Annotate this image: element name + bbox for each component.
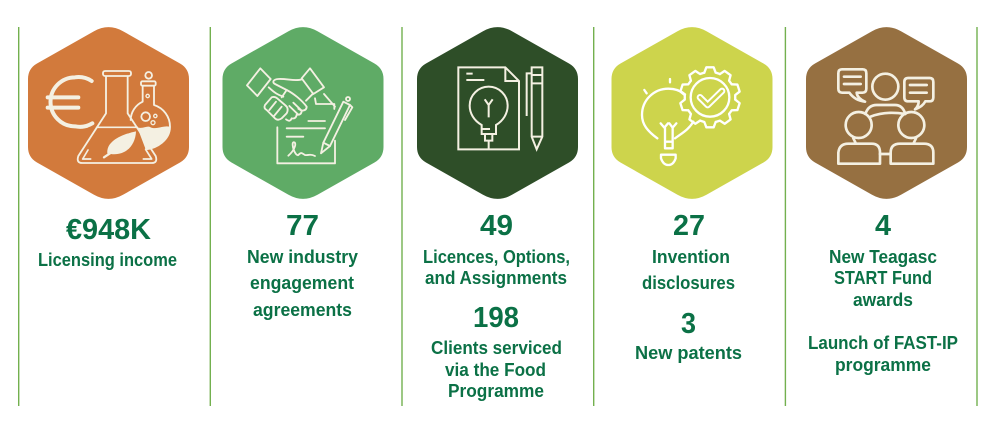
- label: invention disclosures: disclosures: [642, 273, 735, 293]
- hexagon: brown: [806, 27, 967, 199]
- label: new teagasc start fund awards: [829, 247, 937, 310]
- label: new teagasc start fund awards: New Teagasc: [829, 247, 937, 267]
- stat: 77: 77: [286, 210, 319, 242]
- hexagon: orange: [28, 27, 189, 199]
- label: new teagasc start fund awards: START Fund: [834, 268, 932, 288]
- label: new industry engagement agreements: [247, 247, 358, 320]
- panel: licences and clients: [417, 27, 578, 401]
- label: licensing income: Licensing income: [38, 250, 177, 270]
- icon: people in conversation: [838, 69, 933, 164]
- label: clients serviced via the food programme: Programme: [448, 381, 544, 401]
- panel: licensing income: [28, 27, 189, 270]
- label: invention disclosures: [642, 247, 735, 293]
- stat: 948K: €948K: [66, 214, 151, 246]
- label: invention disclosures: Invention: [652, 247, 730, 267]
- label: launch of fast-ip programme: programme: [835, 355, 931, 375]
- label: licences, options and assignments: Licences, Options,: [423, 247, 570, 267]
- stat: 3: 3: [681, 308, 696, 340]
- label: new teagasc start fund awards: awards: [853, 290, 913, 310]
- label: new industry engagement agreements: agreements: [253, 300, 352, 320]
- icon: euro and flasks: [48, 71, 170, 163]
- label: licences, options and assignments: [423, 247, 570, 288]
- icon: light bulb and gear with check mark: [642, 67, 742, 165]
- hexagon: green: [222, 27, 384, 199]
- label: new industry engagement agreements: New industry: [247, 247, 358, 267]
- label: clients serviced via the food programme: Clients serviced: [431, 338, 562, 358]
- label: licences, options and assignments: and Assignments: [425, 268, 567, 288]
- icon: document with light bulb and pen: [458, 67, 542, 149]
- hexagon: dark green: [417, 27, 578, 199]
- stat: 4: 4: [875, 210, 891, 242]
- icon: handshake and signed document: [247, 68, 352, 163]
- label: clients serviced via the food programme: [431, 338, 562, 401]
- label: launch of fast-ip programme: [808, 333, 958, 375]
- panel: invention disclosures and patents: [612, 27, 772, 363]
- label: clients serviced via the food programme: via the Food: [445, 360, 546, 380]
- stat: 49: 49: [480, 210, 513, 242]
- panel: start fund and fast-ip: [806, 27, 967, 375]
- hexagon: lime: [612, 27, 772, 199]
- stat: 27: 27: [673, 210, 705, 242]
- stat: 198: 198: [473, 302, 519, 334]
- label: new patents: New patents: [635, 343, 742, 363]
- label: new industry engagement agreements: engagement: [250, 273, 354, 293]
- panel: industry engagement agreements: [222, 27, 384, 320]
- label: launch of fast-ip programme: Launch of FAST-IP: [808, 333, 958, 353]
